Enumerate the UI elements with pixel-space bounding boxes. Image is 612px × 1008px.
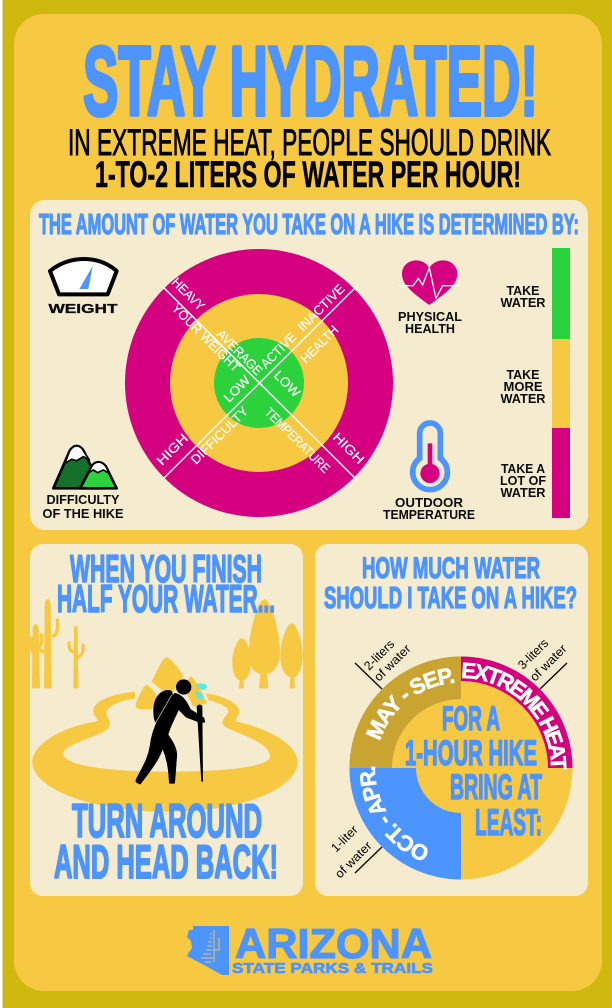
legend labels: WATER [500, 485, 546, 500]
legend labels: TAKE [506, 367, 540, 382]
seasonal pie chart [328, 636, 572, 881]
label: difficulty: DIFFICULTY [46, 492, 120, 507]
legend labels: WATER [500, 391, 546, 406]
subtitle [68, 122, 551, 195]
target chart: AVERAGE [214, 327, 266, 378]
heading: when you finish: HALF YOUR WATER... [57, 578, 275, 621]
seasonal pie chart: 2-liters [361, 637, 397, 673]
seasonal pie chart: of water [527, 642, 570, 684]
legend labels: MORE [504, 379, 543, 394]
panel: factors [30, 200, 588, 530]
target chart: INACTIVE [295, 281, 348, 334]
target chart: HIGH [330, 430, 367, 467]
seasonal pie chart: MAY - SEP. [366, 668, 454, 740]
legend bar [552, 248, 570, 518]
pie centre text [405, 700, 542, 843]
seasonal pie chart: of water [371, 642, 414, 684]
legend labels: WATER [500, 295, 546, 310]
heading: when you finish: WHEN YOU FINISH [70, 548, 262, 591]
heading: turn around [54, 794, 278, 888]
target chart: LOW [221, 372, 254, 405]
icon: weight scale [50, 259, 117, 294]
hiker [137, 679, 207, 783]
target chart: HIGH [154, 431, 191, 468]
legend labels: TAKE [506, 283, 540, 298]
legend labels: LOT OF [500, 473, 546, 488]
logo tagline: STATE PARKS & TRAILS [232, 960, 433, 977]
target chart: YOUR WEIGHT [169, 301, 243, 375]
heading: turn around: TURN AROUND [72, 794, 262, 847]
target chart: TEMPERATURE [262, 405, 334, 476]
target chart: HEALTH [298, 322, 341, 366]
panel: how much water [315, 544, 588, 896]
target chart: ACTIVE [258, 329, 299, 371]
logo: Arizona State Parks and Trails [187, 920, 433, 977]
seasonal pie chart: of water [332, 839, 375, 881]
panel: turn around [30, 544, 303, 896]
label: outdoor temperature: TEMPERATURE [383, 507, 475, 522]
legend labels [500, 283, 546, 500]
heading: when you finish [57, 548, 275, 621]
logo wordmark: ARIZONA [235, 920, 432, 967]
icon: heart [399, 260, 460, 305]
label: outdoor temperature [383, 495, 475, 522]
seasonal pie chart: 1-liter [328, 823, 361, 855]
target chart [125, 249, 393, 517]
heading: turn around: AND HEAD BACK! [54, 835, 278, 888]
pie centre text: BRING AT [450, 768, 542, 807]
legend labels: TAKE A [501, 461, 546, 476]
logo state shape [187, 926, 229, 975]
label: physical health: PHYSICAL [398, 309, 462, 324]
target chart: LOW [271, 368, 304, 401]
seasonal pie chart: EXTREME HEAT [462, 662, 567, 770]
label: physical health [398, 309, 462, 336]
icon: thermometer [413, 423, 447, 490]
label: outdoor temperature: OUTDOOR [395, 495, 464, 510]
seasonal pie chart: 3-liters [515, 636, 551, 672]
target chart: DIFFICULTY [188, 403, 251, 467]
icon: mountains [53, 446, 117, 488]
pie centre text: FOR A [442, 700, 500, 738]
target chart: HEAVY [169, 275, 208, 314]
label: difficulty [42, 492, 124, 521]
pie centre text: LEAST: [475, 802, 542, 843]
label: physical health: HEALTH [405, 321, 455, 336]
panel heading [324, 552, 577, 615]
scene illustration [31, 599, 303, 812]
seasonal pie chart: OCT. - APR. [360, 766, 428, 860]
label: weight: WEIGHT [48, 301, 118, 316]
label: difficulty: OF THE HIKE [42, 506, 124, 521]
